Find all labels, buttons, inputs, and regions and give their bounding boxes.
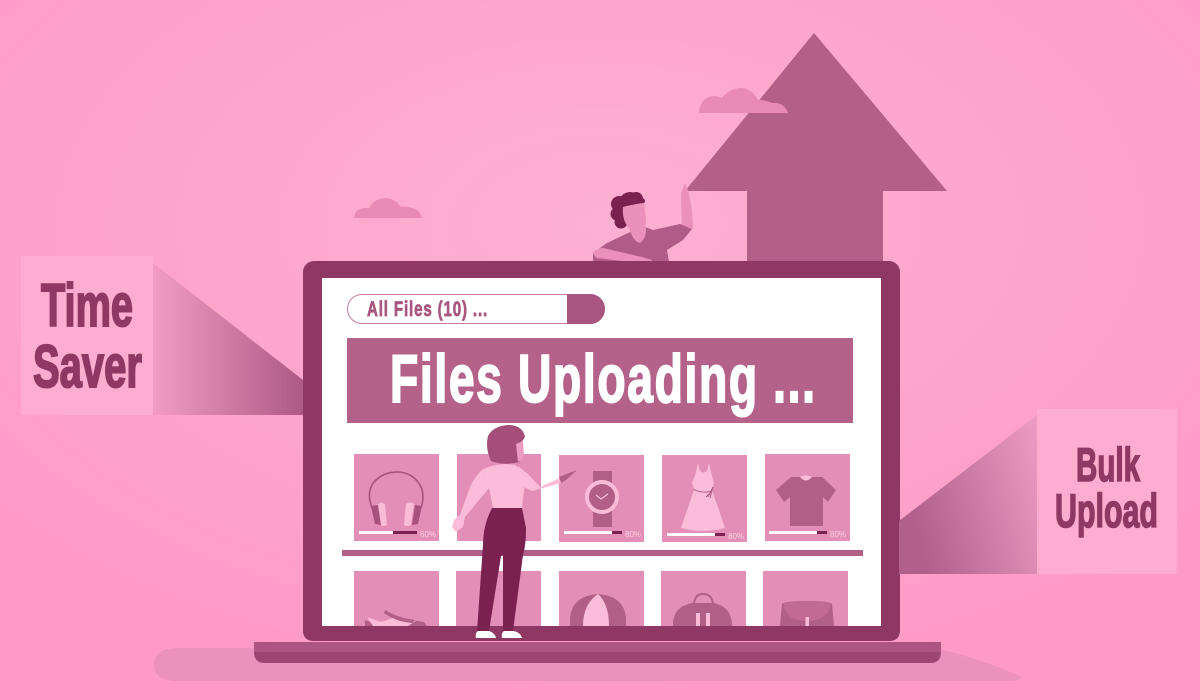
label: Bulk Upload — [1037, 409, 1177, 574]
laptop screen — [322, 278, 881, 626]
tile: dress — [662, 455, 747, 542]
man forearm — [593, 248, 652, 269]
tile: headphones — [354, 454, 439, 541]
tile: watch — [559, 455, 644, 542]
search bar — [348, 294, 605, 324]
watch icon — [593, 471, 612, 527]
label text: Bulk — [1076, 438, 1141, 491]
headphones icon — [369, 472, 423, 508]
laptop frame — [303, 261, 900, 641]
woman left arm — [452, 470, 489, 532]
woman trousers — [477, 508, 526, 631]
laptop bottom bezel — [303, 626, 900, 641]
bag icon — [673, 603, 732, 626]
label: Time Saver — [21, 256, 153, 415]
cloud: upper right — [699, 88, 788, 113]
woman right arm — [518, 466, 561, 491]
backpack icon — [780, 601, 834, 626]
label: Time Saver: Saver — [33, 333, 142, 400]
tile: backpack — [763, 571, 848, 626]
woman — [452, 425, 577, 638]
search bar text: All Files (10) ... — [367, 296, 487, 321]
tile: behind woman — [456, 571, 541, 626]
ground shadow — [154, 648, 1022, 681]
woman hair — [487, 425, 525, 464]
percent: 80% — [625, 530, 641, 539]
banner — [347, 338, 853, 423]
woman torso — [482, 464, 526, 508]
man hair — [610, 192, 645, 228]
label text: Time — [41, 272, 133, 339]
search bar fill — [567, 294, 605, 324]
man torso — [593, 224, 692, 262]
man arm raised — [681, 183, 693, 229]
tile: shoe — [354, 571, 439, 626]
percent: 80% — [728, 532, 744, 541]
laptop base — [254, 642, 941, 663]
banner title: Files Uploading ... — [390, 341, 815, 417]
right connector triangle — [899, 415, 1037, 574]
percent: 60% — [420, 530, 436, 539]
woman shoes — [476, 631, 496, 638]
shoe icon — [365, 620, 427, 626]
tile: cap — [559, 571, 644, 626]
tile: bag — [661, 571, 746, 626]
progress bar — [769, 531, 817, 534]
shelf — [342, 550, 863, 556]
progress bar — [359, 531, 393, 534]
big upload arrow — [685, 33, 947, 265]
t-shirt icon — [776, 477, 836, 526]
man behind laptop — [593, 183, 693, 269]
percent: 80% — [830, 530, 846, 539]
progress bar — [667, 533, 715, 536]
dress icon — [681, 463, 725, 531]
cap icon — [570, 594, 626, 626]
man neck — [629, 226, 646, 243]
tile: t-shirt — [765, 454, 850, 541]
tile: second item — [457, 454, 541, 541]
woman face — [516, 441, 524, 462]
cloud: left — [354, 198, 422, 218]
left connector triangle — [153, 263, 303, 415]
woman hand — [559, 470, 577, 483]
progress bar — [564, 531, 612, 534]
man face — [623, 203, 646, 230]
